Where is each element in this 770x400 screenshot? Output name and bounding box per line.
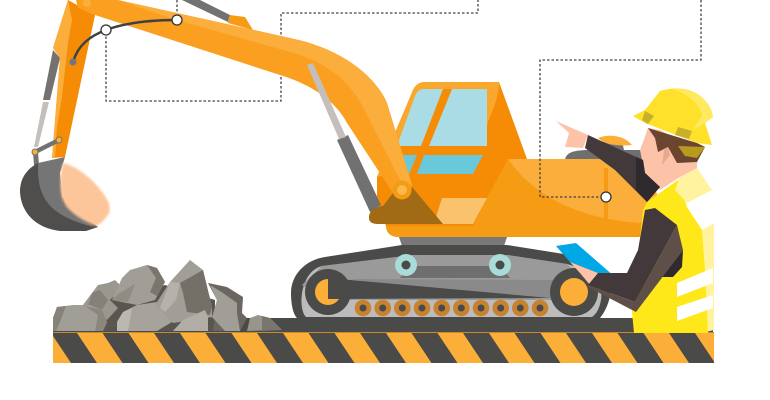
window lower small: [402, 155, 417, 174]
hair: [648, 128, 705, 163]
boom pivot: [392, 180, 412, 200]
excavator: [20, 0, 660, 318]
bucket: [20, 157, 110, 231]
outer track: [291, 245, 610, 318]
dashed callout line right: [540, 0, 701, 197]
vest: [632, 180, 708, 333]
neck and face: [640, 128, 697, 190]
dashed callout lines upper: [106, 0, 478, 101]
helmet: [633, 89, 713, 145]
sleeve shadow: [636, 157, 660, 202]
engine body: [386, 159, 660, 237]
track assembly: [291, 237, 610, 318]
clipboard: [556, 243, 615, 277]
tan step panel: [436, 198, 487, 224]
inner track light band: [301, 255, 601, 317]
vest collar: [675, 168, 712, 203]
hose joint: [70, 58, 76, 66]
lower rollers: [355, 300, 548, 316]
engine top dome: [565, 136, 650, 165]
connector dot 1: [101, 25, 111, 35]
vest right pale panel: [702, 223, 714, 332]
stick cylinder top: [182, 0, 230, 22]
body light panel: [508, 159, 660, 223]
helmet strap: [678, 146, 705, 158]
bucket linkage: [32, 137, 62, 165]
track frame grey: [302, 255, 590, 300]
boom cylinder rod: [307, 63, 346, 139]
ground platform: [53, 318, 713, 333]
cab light trim: [377, 82, 499, 177]
lower arm highlight: [588, 225, 683, 312]
beacon saucer: [598, 136, 632, 145]
reflective stripes: [677, 268, 713, 321]
window right: [429, 89, 487, 146]
hydraulic hose: [73, 20, 177, 62]
cab: [377, 82, 540, 226]
boom bracket: [228, 15, 253, 30]
worker: [556, 89, 714, 333]
connector dot 3: [601, 192, 611, 202]
front idler wheel: [305, 269, 351, 315]
boom base bracket: [369, 187, 443, 224]
window left: [398, 89, 443, 146]
ear: [662, 147, 670, 165]
track base turret: [399, 237, 507, 246]
body shadow: [662, 250, 683, 277]
stick cylinder: [34, 50, 60, 147]
boom arm: [76, 0, 412, 196]
hazard stripe bar: [53, 332, 714, 363]
boom cylinder barrel: [337, 135, 381, 212]
cab shell: [377, 82, 540, 226]
track arm: [328, 278, 550, 299]
window lower main: [417, 155, 483, 174]
rock pile: [53, 260, 282, 331]
raised arm sleeve: [585, 135, 660, 202]
lower hand: [570, 262, 598, 285]
bucket stick: [52, 0, 95, 158]
rear sprocket wheel: [550, 268, 598, 316]
body vertical seam: [604, 168, 608, 237]
upper rollers: [395, 254, 511, 276]
connector dot 2: [172, 15, 182, 25]
pointing hand: [556, 121, 588, 148]
lower arm sleeve: [588, 208, 677, 302]
